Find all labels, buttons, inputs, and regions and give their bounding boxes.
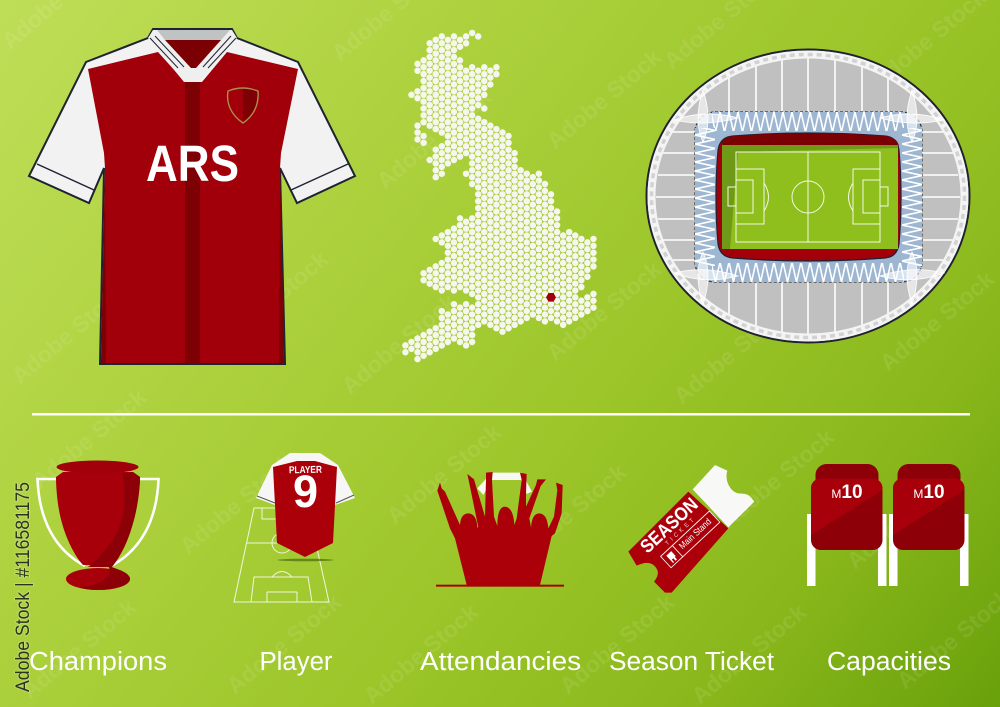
icon: stadium seats [807,464,968,586]
watermark id vertical text: Adobe Stock | #116581175 [13,482,34,692]
icon: season ticket [628,465,754,593]
ticket body [628,492,728,593]
watermark: faint Adobe Stock repeats: Adobe Stock [555,588,679,699]
icon: player shirt on pitch [234,453,355,602]
mini shirt number: 9 [293,466,318,517]
watermark: faint Adobe Stock repeats: Adobe Stock [17,593,141,704]
mini shirt body [273,461,337,557]
watermark: faint Adobe Stock repeats: Adobe Stock [177,118,301,229]
watermark: faint Adobe Stock repeats: Adobe Stock [372,83,496,194]
mini pitch [234,508,329,602]
ticket stub [693,465,754,527]
watermark: faint Adobe Stock repeats: Adobe Stock [7,278,131,389]
shirt shadow [278,559,334,561]
stadium roof band [695,112,922,282]
trophy cup [56,472,140,565]
icon: crowd with scarf [436,472,564,587]
stadium inner stand [716,133,901,261]
label: Season Ticket: Season Ticket [609,648,774,676]
watermark: faint Adobe Stock repeats: Adobe Stock [875,265,999,376]
pitch markings [728,152,888,242]
stadium seating section lines [656,58,960,334]
watermark: faint Adobe Stock repeats: Adobe Stock [359,598,483,707]
mini shirt sleeves and yoke [256,453,355,505]
ticket texts: Main Stand [677,517,713,551]
seat one [811,464,882,550]
mini shirt name: PLAYER [289,465,323,476]
seat two: M10 [913,482,945,503]
pitch [722,145,898,249]
sleeve cuffs [37,164,348,190]
mini shirt cuffs [257,495,354,503]
trophy base [66,568,130,590]
seat two [893,464,964,550]
shirt side shading [101,168,284,363]
shirt silhouette with white sleeves [29,29,355,364]
watermark: faint Adobe Stock repeats: Adobe Stock [507,458,631,569]
crowd silhouette [437,472,563,585]
seat legs [807,514,968,586]
trophy cup shade [88,472,140,567]
watermark: faint Adobe Stock repeats: Adobe Stock [27,383,151,494]
shirt centre stripe [185,82,200,363]
label: Champions: Champions [29,648,167,676]
stadium corner trusses [674,90,944,305]
watermark: faint Adobe Stock repeats: Adobe Stock [542,43,666,154]
large home shirt [29,29,355,364]
crest [228,88,258,123]
watermark: faint Adobe Stock repeats: Adobe Stock [209,245,333,356]
label: Player: Player [260,648,333,676]
watermark: faint Adobe Stock repeats: Adobe Stock [175,448,299,559]
trophy handles [38,479,158,566]
collar [148,30,237,82]
watermark: faint Adobe Stock repeats: Adobe Stock [542,255,666,366]
map location marker [546,293,556,302]
ticket texts: SEASON [637,494,703,558]
map cells [405,33,593,359]
ticket texts [637,491,720,573]
watermark: faint Adobe Stock repeats: Adobe Stock [382,418,506,529]
watermark: faint Adobe Stock repeats: Adobe Stock [687,598,811,707]
watermark: faint Adobe Stock repeats: Adobe Stock [337,288,461,399]
label: Capacities: Capacities [827,648,951,676]
ticket texts: TICKET [665,517,696,547]
watermark: faint Adobe Stock repeats: Adobe Stock [842,463,966,574]
shirt text ARS: ARS [146,135,239,192]
scarf [477,473,532,495]
stand top shadow [721,133,899,146]
trophy rim [56,460,138,474]
seat one: M10 [831,482,863,503]
watermark: faint Adobe Stock repeats: Adobe Stock [222,588,346,699]
hexagon map of Great Britain [405,33,593,359]
stadium outer truss ring [652,54,964,338]
watermark: faint Adobe Stock repeats: Adobe Stock [715,423,839,534]
divider line [32,413,970,416]
label: Attendancies: Attendancies [420,648,581,676]
shirt red body [88,52,298,363]
watermark: faint Adobe Stock repeats: Adobe Stock [669,298,793,409]
icon: trophy [38,460,158,590]
stadium plan [646,50,970,342]
stadium outer bowl [646,50,970,342]
crowd base line [436,585,564,587]
